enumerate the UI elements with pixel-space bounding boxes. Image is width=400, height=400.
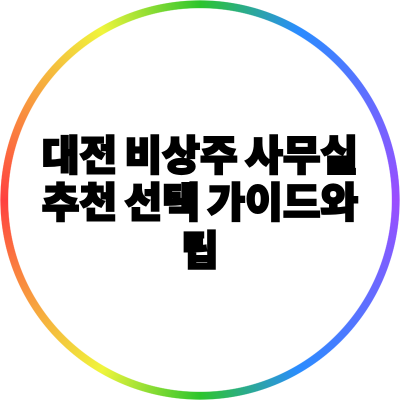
title line 2: 추천 선택 가이드와 [42,180,358,226]
title line 1: 대전 비상주 사무실 [42,133,358,179]
title line 3: 팁 [181,228,219,274]
